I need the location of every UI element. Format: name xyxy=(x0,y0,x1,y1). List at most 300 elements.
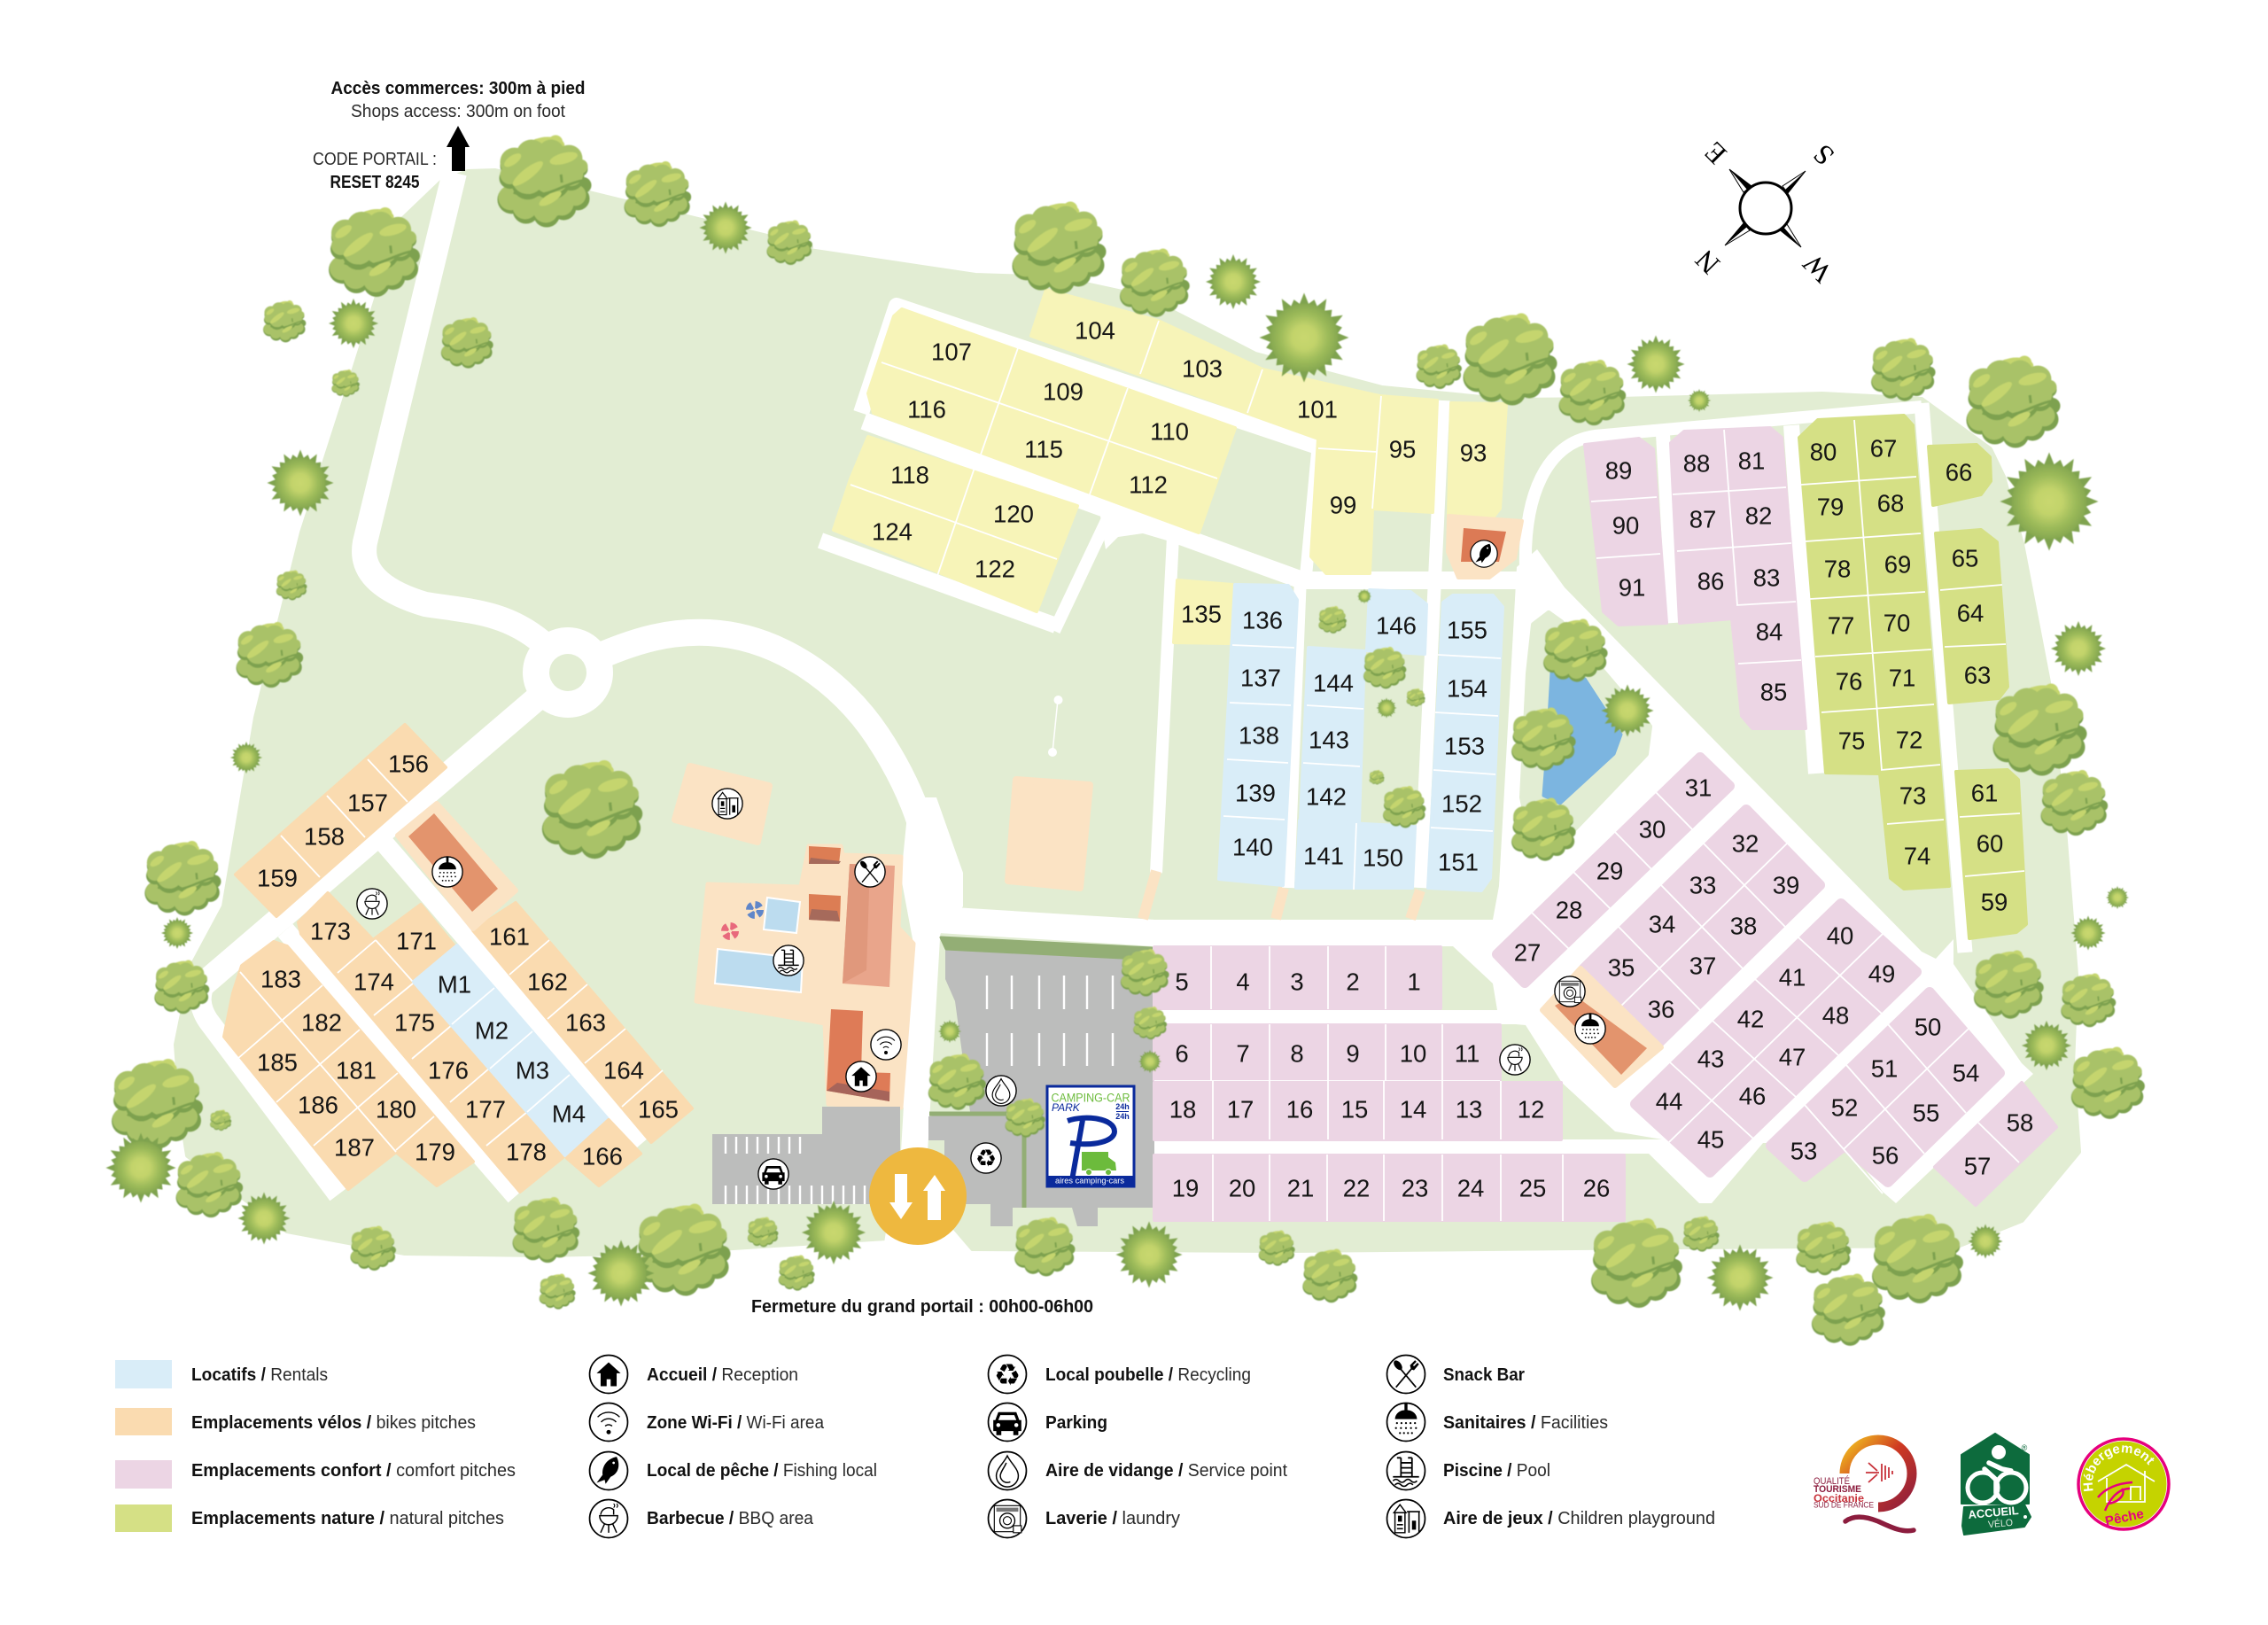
comfort pitches 89-91 xyxy=(1585,439,1666,625)
rentals column 136-140: 137 xyxy=(1240,665,1281,691)
compass: W xyxy=(1796,247,1837,289)
comfort block 27-31: 27 xyxy=(1514,939,1541,966)
nature pitches 80-74: 74 xyxy=(1904,842,1930,870)
reception building xyxy=(827,1009,890,1101)
icon: parking xyxy=(989,1403,1026,1441)
comfort row 19-26 xyxy=(1154,1155,1624,1221)
yellow block 107-112: 116 xyxy=(907,395,946,424)
comfort row 19-26: 21 xyxy=(1287,1175,1314,1201)
icon: recycling xyxy=(989,1356,1026,1393)
rentals 144-142: 143 xyxy=(1309,727,1349,753)
snack bar roof xyxy=(843,864,895,987)
rentals M1-M4: M1 xyxy=(438,971,471,998)
comfort block 50-56: 52 xyxy=(1831,1093,1858,1122)
road: lane by 93 xyxy=(1420,400,1443,888)
yellow pitch 135 xyxy=(1174,580,1232,643)
label: Local de pêche / Fishing local xyxy=(647,1461,877,1481)
yellow block 104-99: 103 xyxy=(1182,354,1223,383)
nature pitches 61-59 xyxy=(1956,770,2026,938)
logo: hébergement pêche: Hébergement xyxy=(2083,1445,2155,1492)
logo: hébergement pêche: Pêche xyxy=(2104,1506,2145,1529)
comfort pitches 88-85: 81 xyxy=(1738,447,1765,475)
rentals column 136-140 xyxy=(1219,585,1297,885)
small building two xyxy=(809,894,841,921)
comfort block 40-49: 43 xyxy=(1697,1046,1724,1072)
bike pitches 173-178: 176 xyxy=(428,1056,469,1085)
rentals 144-142: 142 xyxy=(1306,783,1347,810)
icon: recycling xyxy=(971,1143,1001,1173)
comfort pitches 57-58: 58 xyxy=(2007,1109,2033,1136)
playground pad xyxy=(675,766,769,842)
bike pitches 173-178: 178 xyxy=(506,1138,547,1166)
yellow block 118-122: 124 xyxy=(872,517,913,546)
road: upper loop xyxy=(861,306,1320,447)
comfort pitches 88-85: 87 xyxy=(1689,505,1716,533)
nature pitches 80-74: 67 xyxy=(1870,434,1897,463)
legend: pitch types xyxy=(115,1360,516,1532)
icon: service point xyxy=(986,1076,1016,1106)
comfort block 27-31: 29 xyxy=(1596,858,1623,884)
comfort block 50-56: 51 xyxy=(1871,1054,1898,1083)
nature pitches 80-74: 77 xyxy=(1828,611,1854,640)
logo: accueil vélo: ACCUEIL xyxy=(1968,1504,2019,1521)
bike pitches 161-165 xyxy=(473,903,692,1142)
label: Barbecue / BBQ area xyxy=(647,1509,814,1528)
nature pitches 80-74: 78 xyxy=(1824,555,1851,583)
icon: wifi xyxy=(590,1403,627,1441)
comfort pitches 57-58 xyxy=(1935,1083,2056,1205)
arrow to shops xyxy=(447,126,470,171)
swatch nature xyxy=(115,1504,172,1532)
comfort pitches 88-85: 86 xyxy=(1697,567,1724,595)
nature pitches 80-74: 75 xyxy=(1838,727,1865,755)
letter P mark xyxy=(1068,1118,1115,1180)
logo: qualité tourisme occitanie: Occitanie xyxy=(1814,1492,1864,1504)
rentals 141 and 150: 150 xyxy=(1363,844,1403,872)
comfort block 40-49: 45 xyxy=(1697,1125,1724,1154)
comfort block 40-49: 49 xyxy=(1868,960,1895,987)
road: exit xyxy=(882,1230,975,1255)
rentals 141 and 150 xyxy=(1296,820,1415,890)
yellow block 104-99 xyxy=(1031,290,1437,573)
yellow pitch 93 xyxy=(1449,403,1506,517)
label: Sanitaires / Facilities xyxy=(1443,1413,1608,1433)
comfort pitches 88-85: 83 xyxy=(1753,564,1780,592)
bike pitches 161-165: 165 xyxy=(638,1095,679,1124)
road: central drive xyxy=(585,633,930,1152)
road: junction xyxy=(901,797,963,1108)
asphalt xyxy=(928,948,1154,1226)
comfort row 19-26: 23 xyxy=(1402,1175,1428,1201)
small building one xyxy=(809,846,841,864)
comfort row 6-11: 11 xyxy=(1455,1040,1480,1067)
logo: hébergement pêche xyxy=(2077,1437,2171,1531)
bike pitches 173-178: 177 xyxy=(465,1095,506,1124)
comfort pitches 57-58: 57 xyxy=(1964,1152,1991,1180)
icon: pool xyxy=(773,945,804,976)
pond xyxy=(1543,673,1621,804)
small pool xyxy=(764,898,800,933)
label comfort: Emplacements confort / comfort pitches xyxy=(191,1461,516,1481)
rentals column 155-151: 151 xyxy=(1438,849,1479,875)
arrow up xyxy=(923,1175,945,1220)
label rentals: Locatifs / Rentals xyxy=(191,1365,328,1385)
gate code note xyxy=(313,150,437,192)
icon: parking xyxy=(758,1159,788,1189)
icon: laundry xyxy=(1555,976,1585,1007)
icon: pool xyxy=(1387,1452,1425,1489)
rentals M1-M4 xyxy=(414,945,609,1155)
icon: bbq west xyxy=(357,889,387,919)
nature pitches 61-59: 59 xyxy=(1981,888,2008,916)
bike pitches 183-187: 182 xyxy=(301,1008,342,1037)
bay markings xyxy=(726,1137,865,1204)
nature pitches 80-74: 68 xyxy=(1877,489,1904,517)
legend: services column 1 xyxy=(590,1356,877,1537)
nature pitches 61-59: 60 xyxy=(1977,829,2003,858)
icon: bbq east xyxy=(1500,1045,1530,1075)
icon: service point xyxy=(989,1452,1026,1489)
comfort row 5-1: 1 xyxy=(1407,968,1421,996)
logo: qualité tourisme occitanie xyxy=(1814,1440,1914,1531)
bike pitches 183-187: 185 xyxy=(257,1049,298,1076)
sand pad xyxy=(1008,780,1090,888)
logo: qualité tourisme occitanie: SUD DE FRANCE xyxy=(1814,1501,1874,1510)
car park north xyxy=(928,937,1154,1226)
label: Aire de vidange / Service point xyxy=(1045,1461,1287,1481)
comfort block 40-49: 46 xyxy=(1739,1083,1766,1109)
site ground xyxy=(176,171,2078,1255)
bike pitches 161-165: 162 xyxy=(527,968,568,996)
car park west xyxy=(712,1107,900,1204)
nature pitches 61-59: 61 xyxy=(1971,780,1998,806)
hedges inner xyxy=(929,1114,1024,1208)
comfort block 50-56: 53 xyxy=(1790,1138,1817,1164)
comfort row 18-12: 12 xyxy=(1518,1095,1544,1124)
comfort block 27-31: 28 xyxy=(1556,897,1582,923)
camping-car park sign: PARK xyxy=(1052,1101,1081,1114)
bike pitch 166: 166 xyxy=(582,1143,623,1170)
arrow down xyxy=(889,1174,913,1219)
bike pitches 156-159: 156 xyxy=(388,750,429,778)
compass: N xyxy=(1689,244,1726,281)
camping-car park sign: CAMPING-CAR xyxy=(1051,1092,1130,1104)
road: service lanes xyxy=(1156,537,1301,888)
road: north-east curve xyxy=(1526,407,1922,567)
icon: showers xyxy=(1387,1403,1425,1441)
rentals column 155-151: 153 xyxy=(1444,732,1485,760)
rentals column 155-151 xyxy=(1428,595,1503,890)
bike pitches 173-178: 173 xyxy=(310,918,351,945)
bay markings xyxy=(987,976,1113,1066)
label: Snack Bar xyxy=(1443,1365,1525,1385)
bike pitches 156-159 xyxy=(236,725,446,916)
icon: showers east xyxy=(1575,1014,1605,1044)
icon: fishing xyxy=(1471,540,1497,567)
bike pitches 173-178: 175 xyxy=(394,1008,435,1037)
fishing building xyxy=(1448,516,1522,578)
comfort block 32-39: 37 xyxy=(1689,952,1716,980)
yellow pitch 93: 93 xyxy=(1460,439,1487,466)
comfort block 40-49: 42 xyxy=(1737,1005,1764,1033)
asphalt xyxy=(712,1107,900,1204)
nature pitches 65-63: 64 xyxy=(1957,599,1984,627)
nature pitches 80-74 xyxy=(1799,416,1949,889)
icon: laundry xyxy=(989,1500,1026,1537)
logo: accueil vélo xyxy=(1961,1434,2031,1535)
reception and pool area xyxy=(696,846,913,1108)
bike pitches 183-187: 180 xyxy=(376,1095,416,1124)
yellow block 118-122: 122 xyxy=(975,555,1015,583)
comfort block 32-39: 38 xyxy=(1730,913,1757,939)
camping-car park sign xyxy=(1046,1086,1134,1187)
peach terrace xyxy=(696,846,913,1108)
comfort block 40-49: 48 xyxy=(1822,1001,1849,1030)
comfort row 18-12: 18 xyxy=(1169,1095,1196,1124)
road: east lane xyxy=(1922,403,1965,952)
comfort block 27-31: 31 xyxy=(1685,774,1712,801)
shops access note: Shops access: 300m on foot xyxy=(351,102,565,121)
gate code note: CODE PORTAIL : xyxy=(313,150,437,169)
rentals column 136-140: 140 xyxy=(1232,833,1273,861)
comfort pitches 88-85 xyxy=(1671,428,1806,728)
comfort row 18-12 xyxy=(1154,1081,1561,1139)
nature pitches 65-63: 63 xyxy=(1964,661,1991,689)
comfort pitches 88-85: 84 xyxy=(1756,618,1783,645)
comfort pitches 89-91: 90 xyxy=(1612,512,1639,539)
comfort block 27-31 xyxy=(1497,758,1729,983)
nature pitches 80-74: 79 xyxy=(1817,493,1844,521)
comfort block 32-39: 32 xyxy=(1732,829,1759,858)
road: pitch lanes xyxy=(1663,434,1674,623)
bike pitches 183-187: 181 xyxy=(336,1056,377,1085)
yellow block 107-112: 112 xyxy=(1129,471,1168,498)
logo: qualité tourisme occitanie: QUALITÉ xyxy=(1814,1475,1850,1487)
road: diagonal sector surface xyxy=(1453,549,2033,1203)
yellow block 107-112: 110 xyxy=(1150,418,1189,445)
bike pitches 183-187: 186 xyxy=(298,1092,338,1118)
comfort row 6-11: 8 xyxy=(1290,1040,1304,1067)
bike pitches 161-165: 164 xyxy=(603,1056,644,1085)
road: left branch xyxy=(201,982,338,1194)
comfort block 40-49: 41 xyxy=(1779,964,1806,991)
icon: snack bar xyxy=(855,857,885,887)
comfort row 19-26: 20 xyxy=(1229,1175,1255,1201)
comfort block 50-56 xyxy=(1771,992,2000,1193)
rental 146: 146 xyxy=(1376,611,1417,640)
comfort block 32-39: 33 xyxy=(1689,872,1716,898)
bike pitches 156-159: 159 xyxy=(257,865,298,891)
nature pitches 80-74: 72 xyxy=(1896,727,1922,753)
nature pitches 80-74: 69 xyxy=(1884,551,1911,578)
bike pitches 183-187: 187 xyxy=(334,1134,375,1161)
comfort block 50-56: 56 xyxy=(1872,1141,1899,1170)
nature pitches 80-74: 80 xyxy=(1810,438,1837,466)
comfort row 18-12: 16 xyxy=(1286,1095,1313,1124)
rentals column 136-140: 138 xyxy=(1239,721,1279,750)
rentals 144-142 xyxy=(1301,648,1364,823)
large pool xyxy=(715,949,803,992)
road: upper loop east leg xyxy=(1306,443,1318,576)
bike pitches 173-178: 174 xyxy=(353,968,394,996)
nature pitch 66 xyxy=(1929,445,1991,505)
icon: snack bar xyxy=(1387,1356,1425,1393)
comfort block 50-56: 50 xyxy=(1915,1014,1941,1040)
comfort row 6-11 xyxy=(1154,1024,1500,1081)
label: Zone Wi-Fi / Wi-Fi area xyxy=(647,1413,825,1433)
nature pitch 66: 66 xyxy=(1946,459,1972,486)
comfort row 5-1 xyxy=(1154,946,1441,1009)
icon: reception xyxy=(590,1356,627,1393)
bike pitch 166 xyxy=(567,1120,641,1186)
shops access note xyxy=(331,79,585,121)
rentals column 155-151: 155 xyxy=(1447,617,1487,643)
comfort block 32-39: 35 xyxy=(1608,953,1635,982)
legend: services column 3 xyxy=(1387,1356,1715,1537)
label: Piscine / Pool xyxy=(1443,1461,1550,1481)
swatch bikes xyxy=(115,1408,172,1435)
hedge xyxy=(941,937,1152,959)
road: west drive xyxy=(364,173,542,642)
road: lower terrace xyxy=(820,540,1056,626)
comfort pitches 88-85: 88 xyxy=(1683,450,1710,477)
comfort row 5-1: 3 xyxy=(1290,968,1304,996)
road: pitch lane 2 xyxy=(1791,425,1816,774)
icon: fishing xyxy=(590,1452,627,1489)
rentals column 155-151: 154 xyxy=(1447,675,1487,702)
comfort pitches 89-91: 91 xyxy=(1619,574,1645,601)
comfort row 6-11: 10 xyxy=(1400,1040,1426,1067)
bike pitches 156-159: 157 xyxy=(347,789,388,817)
yellow block 118-122: 120 xyxy=(993,500,1034,528)
motorhome xyxy=(1082,1152,1116,1175)
sanitary block east xyxy=(1542,968,1661,1085)
label nature: Emplacements nature / natural pitches xyxy=(191,1509,504,1528)
logo: accueil vélo: VÉLO xyxy=(1987,1517,2014,1530)
compass xyxy=(1689,136,1840,289)
comfort pitches 88-85: 82 xyxy=(1745,501,1772,530)
comfort block 32-39: 39 xyxy=(1773,872,1799,898)
yellow block 107-112: 109 xyxy=(1043,377,1084,406)
road: south-west xyxy=(202,696,540,985)
bike pitches 183-187: 183 xyxy=(260,966,301,992)
label bikes: Emplacements vélos / bikes pitches xyxy=(191,1413,476,1433)
logo: qualité tourisme occitanie: TOURISME xyxy=(1814,1484,1861,1495)
road: terrace link joint xyxy=(1099,505,1178,549)
comfort block 40-49 xyxy=(1635,904,1916,1172)
icon: playground xyxy=(712,789,742,819)
map icons xyxy=(357,540,1605,1189)
comfort block 27-31: 30 xyxy=(1639,815,1666,844)
comfort row 18-12: 14 xyxy=(1400,1095,1426,1124)
compass: E xyxy=(1697,136,1733,171)
yellow block 118-122: 118 xyxy=(890,461,929,489)
gate code note: RESET 8245 xyxy=(330,173,420,192)
road: loop lower xyxy=(864,421,1524,580)
comfort row 5-1: 2 xyxy=(1346,968,1360,996)
comfort block 40-49: 40 xyxy=(1827,921,1853,950)
parasol blue xyxy=(750,905,760,915)
comfort block 32-39 xyxy=(1584,810,1820,1044)
road: middle branch xyxy=(285,930,516,1196)
comfort row 6-11: 7 xyxy=(1236,1040,1250,1067)
camping-car park sign: 24h xyxy=(1115,1112,1130,1121)
nature pitches 80-74: 71 xyxy=(1889,665,1915,691)
yellow block 104-99: 99 xyxy=(1330,491,1356,519)
icon: reception xyxy=(846,1061,876,1092)
trees xyxy=(106,135,2145,1346)
camping-car park sign: 24h xyxy=(1115,1102,1130,1111)
comfort block 50-56: 54 xyxy=(1953,1060,1979,1086)
comfort row 18-12: 17 xyxy=(1227,1095,1254,1124)
nature pitches 65-63: 65 xyxy=(1952,544,1978,572)
bike pitches 183-187 xyxy=(224,942,473,1189)
road: horizontal main xyxy=(939,920,1506,933)
comfort row 19-26: 22 xyxy=(1343,1175,1370,1201)
yellow pitch 135: 135 xyxy=(1181,601,1222,627)
rentals M1-M4: M3 xyxy=(516,1056,549,1085)
nature pitches 80-74: 76 xyxy=(1836,668,1862,695)
comfort row 19-26: 26 xyxy=(1583,1175,1610,1201)
parasol pink xyxy=(725,926,735,937)
legend: services column 2 xyxy=(989,1356,1287,1537)
comfort row 6-11: 6 xyxy=(1175,1040,1189,1067)
nature pitches 65-63 xyxy=(1936,530,2008,703)
comfort row 19-26: 19 xyxy=(1172,1175,1199,1201)
road: pond island xyxy=(1522,613,1650,855)
rental 146 xyxy=(1367,590,1426,654)
label: Aire de jeux / Children playground xyxy=(1443,1509,1715,1528)
rentals column 136-140: 139 xyxy=(1235,780,1276,806)
swatch rentals xyxy=(115,1360,172,1388)
comfort row 18-12: 13 xyxy=(1456,1095,1482,1124)
comfort pitches 88-85: 85 xyxy=(1760,679,1787,705)
label: Local poubelle / Recycling xyxy=(1045,1365,1251,1385)
bike pitches 173-178: 171 xyxy=(396,927,437,955)
label: Parking xyxy=(1045,1413,1107,1433)
comfort row 6-11: 9 xyxy=(1346,1040,1360,1067)
icon: playground xyxy=(1387,1500,1425,1537)
sanitary block west xyxy=(398,804,516,929)
label: Accueil / Reception xyxy=(647,1365,798,1385)
rentals column 155-151: 152 xyxy=(1441,790,1482,817)
yellow block 107-112 xyxy=(868,309,1235,533)
label: Laverie / laundry xyxy=(1045,1509,1180,1528)
rentals column 136-140: 136 xyxy=(1242,606,1283,634)
bike pitches 156-159: 158 xyxy=(304,822,345,851)
gate closing note: Fermeture du grand portail : 00h00-06h00 xyxy=(751,1297,1093,1317)
yellow block 104-99: 95 xyxy=(1389,436,1416,463)
road: terrace link xyxy=(1054,509,1112,631)
roundabout xyxy=(523,627,613,718)
camping-car park sign: aires camping-cars xyxy=(1055,1177,1124,1186)
comfort block 50-56: 55 xyxy=(1913,1099,1939,1127)
nature pitches 80-74: 73 xyxy=(1899,781,1926,810)
comfort block 32-39: 34 xyxy=(1649,911,1675,937)
comfort row 5-1: 5 xyxy=(1175,968,1189,996)
rentals 141 and 150: 141 xyxy=(1303,842,1344,870)
yellow block 118-122 xyxy=(834,437,1077,611)
shops access note: Accès commerces: 300m à pied xyxy=(331,79,585,98)
yellow block 104-99: 101 xyxy=(1297,395,1338,424)
service path dots xyxy=(1048,696,1063,757)
rentals M1-M4: M2 xyxy=(475,1017,509,1044)
road: right branch xyxy=(379,837,642,1143)
logo: accueil vélo: ® xyxy=(2022,1443,2028,1452)
yellow block 107-112: 115 xyxy=(1024,436,1063,463)
icon: showers west xyxy=(432,857,462,887)
icon: bbq xyxy=(590,1500,627,1537)
